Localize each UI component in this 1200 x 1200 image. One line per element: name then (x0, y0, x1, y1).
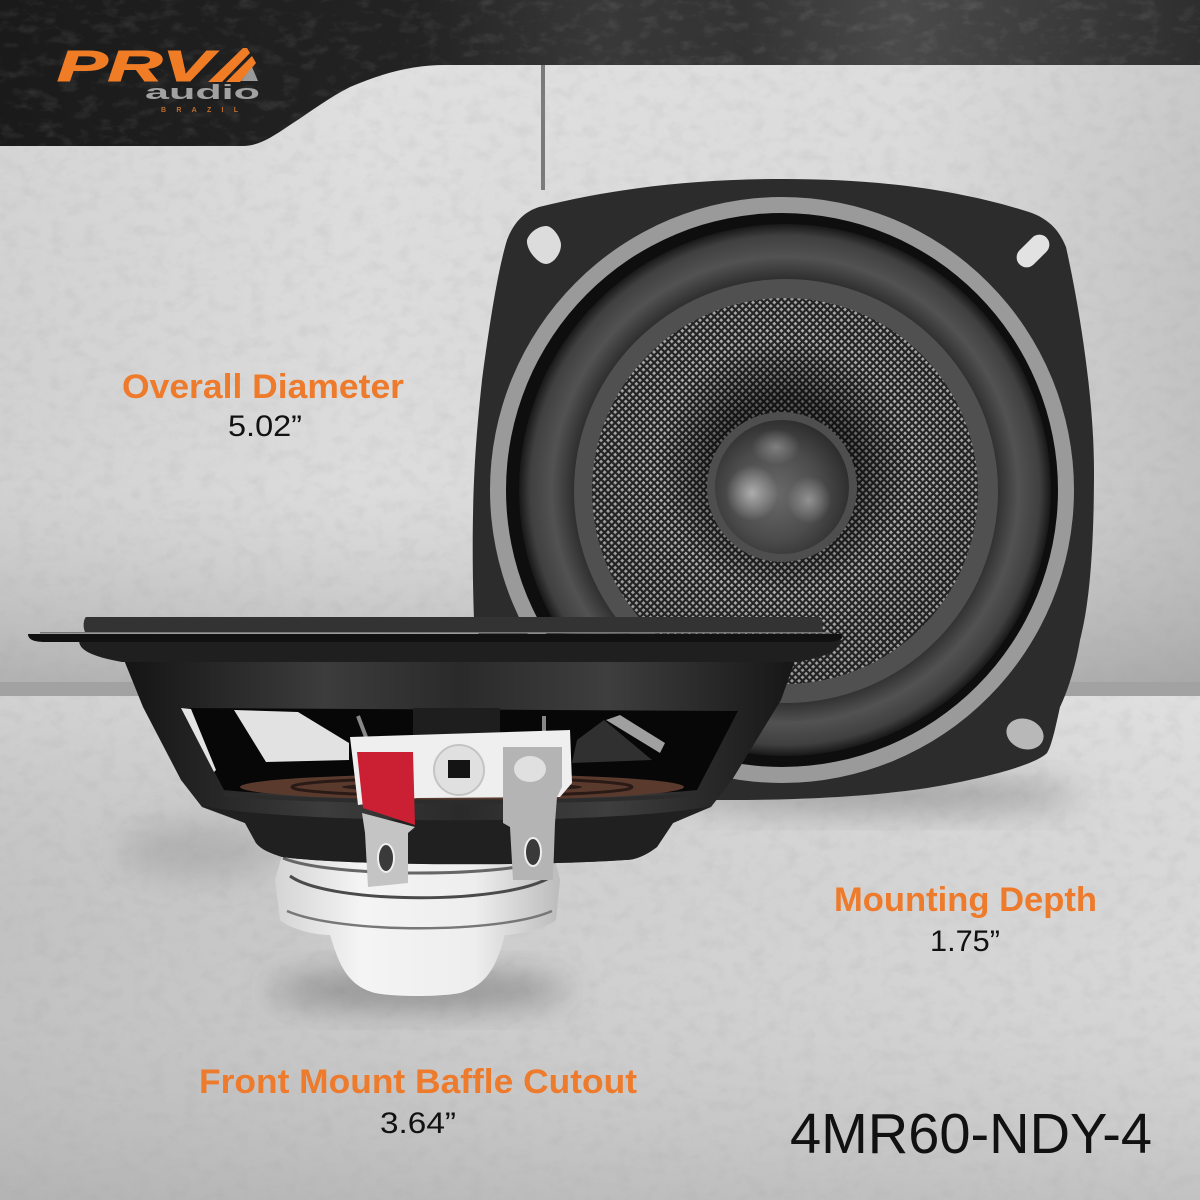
label: Overall Diameter: Overall Diameter (122, 368, 404, 406)
label: Front Mount Baffle Cutout: Front Mount Baffle Cutout (199, 1063, 637, 1101)
window: wall sliver (181, 708, 216, 772)
background: concrete floor (0, 696, 1200, 1200)
cone mesh (592, 298, 978, 684)
label: Mounting Depth (834, 881, 1097, 958)
logo Brazil: BRAZIL (161, 107, 239, 114)
side speaker shadow (270, 972, 570, 1008)
side speaker basket (122, 655, 797, 864)
background: concrete wall (0, 0, 1200, 697)
mounting hole top right (1012, 230, 1054, 272)
label: Mounting Depth: 1.75” (930, 925, 1000, 958)
terminal strip (350, 716, 572, 887)
basket lower band (202, 806, 711, 864)
left spade (362, 813, 415, 887)
logo audio: audio (145, 82, 260, 104)
cone rim (574, 279, 998, 703)
front speaker shadow (680, 779, 1080, 811)
label: Front Mount Baffle Cutout (199, 1063, 637, 1140)
center rivet (434, 745, 484, 795)
surround (519, 224, 1051, 756)
terminal body (350, 730, 572, 805)
logo grey triangle (241, 67, 258, 81)
side speaker (28, 617, 842, 1008)
front speaker (473, 179, 1094, 811)
flange lip (28, 634, 842, 642)
label: Overall Diameter (122, 368, 404, 443)
window: ring behind (606, 715, 665, 753)
label: Mounting Depth: Mounting Depth (834, 881, 1097, 919)
header: dark textured band (0, 0, 1200, 146)
side speaker magnet (275, 852, 560, 996)
window: basket strip (413, 708, 500, 735)
logo stripes (208, 48, 256, 82)
window: speaker behind (572, 720, 652, 763)
window: wall wedge (234, 710, 349, 762)
dust cap (707, 412, 857, 562)
mounting hole bottom right (1002, 713, 1048, 755)
flange rim (79, 640, 840, 662)
logo: PRV Audio Brazil (57, 42, 260, 114)
outer ring (490, 197, 1074, 783)
label: Overall Diameter: 5.02” (228, 410, 302, 443)
wires (358, 716, 544, 737)
basket lower edge (224, 794, 700, 802)
mounting hole top left (527, 226, 561, 264)
silver terminal (503, 747, 562, 880)
voice coil (240, 774, 684, 800)
red terminal (357, 752, 415, 825)
front speaker frame (473, 179, 1094, 800)
label: Front Mount Baffle Cutout: 3.64” (380, 1107, 456, 1140)
model number: 4MR60-NDY-4 (790, 1102, 1152, 1166)
flange gasket (84, 617, 823, 632)
basket window (181, 708, 738, 800)
logo wordmark PRV: PRV (57, 42, 219, 91)
